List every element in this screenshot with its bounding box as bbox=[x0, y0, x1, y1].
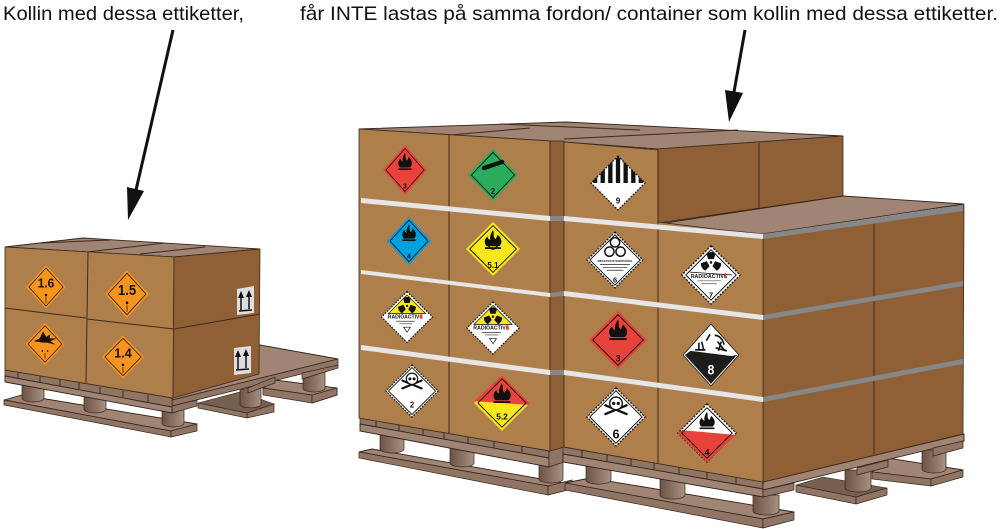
label: class 7 bbox=[682, 246, 740, 304]
label: class 6 biohazard bbox=[587, 232, 643, 288]
straps: front white bbox=[361, 198, 763, 402]
label: class 6 biohazard: 6 bbox=[613, 275, 617, 284]
label: class 4.3 bbox=[678, 404, 736, 462]
text: right caption: får INTE lastas på samma fordon/ container som kollin med dessa ettiketter. bbox=[300, 3, 998, 25]
label: class 8: 8 bbox=[708, 362, 714, 378]
label: class 1.5: 1.5 bbox=[118, 282, 136, 298]
label: class 5.2: 5.2 bbox=[496, 412, 508, 422]
icon: this way up lower bbox=[234, 346, 251, 375]
label: class 9: 9 bbox=[616, 197, 621, 206]
label: class 1.6: 1.6 bbox=[38, 276, 54, 291]
pallet: large, left section bbox=[359, 418, 572, 495]
label: class 5.2 bbox=[474, 375, 530, 431]
text: left caption: Kollin med dessa ettiketter, bbox=[3, 3, 244, 25]
label: class 1.6 bbox=[26, 265, 66, 309]
label: class 1 explosive bbox=[25, 323, 65, 365]
label: class 2 green: 2 bbox=[491, 187, 495, 196]
label: class 6 skull left: 2 bbox=[410, 401, 415, 410]
arrow: to small pallet bbox=[127, 30, 173, 220]
label: class 7: 7 bbox=[709, 290, 713, 299]
label: radioactive left bbox=[382, 292, 432, 342]
label: class 5.1: 5.1 bbox=[487, 261, 499, 270]
boxes: large stack bbox=[359, 122, 964, 482]
label: class 1.4 bbox=[102, 335, 144, 379]
label: class 6 skull right: 6 bbox=[612, 427, 620, 441]
arrow: to large pallet bbox=[725, 30, 745, 122]
label: class 1.5 bbox=[105, 270, 149, 318]
boxes: small stack bbox=[5, 238, 260, 398]
label: class 3 bbox=[383, 145, 427, 195]
label: class 6 skull left bbox=[386, 365, 438, 417]
label: radioactive right bbox=[467, 302, 519, 354]
label: class 6 biohazard: INFECTIOUS SUBSTANCE bbox=[598, 259, 633, 263]
pallet: small bbox=[4, 345, 338, 437]
icon: this way up upper bbox=[237, 286, 254, 315]
label: radioactive right: RADIOACTIVE bbox=[473, 325, 510, 331]
pallet: large, right section bbox=[563, 434, 964, 528]
label: class 1.4: 1.4 bbox=[114, 346, 133, 361]
label: class 9 bbox=[591, 156, 645, 210]
straps: side grey bbox=[550, 205, 963, 402]
label: class 6 skull right bbox=[587, 388, 645, 446]
label: class 4.3: 4 bbox=[705, 447, 710, 457]
label: class 4 blue: 4 bbox=[407, 253, 411, 261]
label: class 4 blue bbox=[387, 217, 431, 265]
label: class 3 right bbox=[589, 311, 647, 369]
label: class 3: 3 bbox=[403, 183, 407, 190]
label: class 3 right: 3 bbox=[616, 353, 621, 363]
label: class 2 green bbox=[468, 149, 518, 201]
label: radioactive left: RADIOACTIVE bbox=[388, 314, 423, 320]
label: class 8 bbox=[683, 324, 739, 386]
label: class 7: RADIOACTIVE bbox=[691, 274, 728, 280]
label: class 5.1 bbox=[466, 222, 520, 276]
